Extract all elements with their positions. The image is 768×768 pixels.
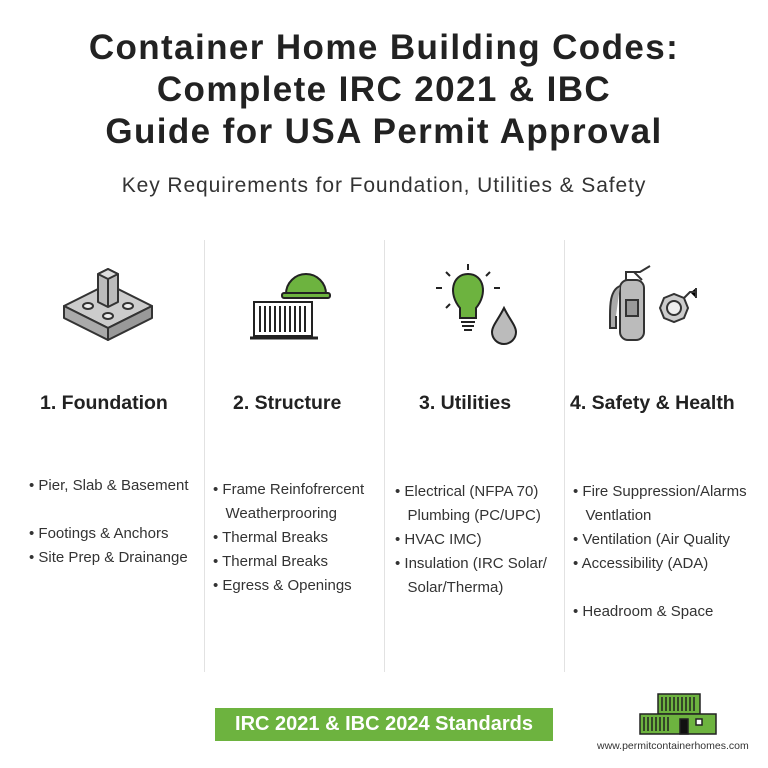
list: utilities: • HVAC IMC) (395, 531, 482, 548)
subtitle: Key Requirements for Foundation, Utilities & Safety (122, 174, 646, 197)
list: structure: • Thermal Breaks (213, 553, 328, 570)
title: Guide for USA Permit Approval (105, 112, 663, 151)
list: utilities: • Electrical (NFPA 70) (395, 483, 538, 500)
website url: www.permitcontainerhomes.com (597, 740, 749, 752)
title: Complete IRC 2021 & IBC (157, 70, 611, 109)
title: Container Home Building Codes: (89, 28, 679, 67)
title (89, 28, 679, 151)
list: structure (213, 481, 364, 594)
list: structure: • Frame Reinfofrercent (213, 481, 364, 498)
list: utilities: • Insulation (IRC Solar/ (395, 555, 547, 572)
logo: container homes (639, 693, 717, 735)
banner: standards: IRC 2021 & IBC 2024 Standards (235, 713, 533, 735)
list: foundation: • Site Prep & Drainange (29, 549, 188, 566)
banner: standards (215, 708, 553, 741)
heading: structure: 2. Structure (233, 392, 341, 414)
list: safety (573, 483, 747, 620)
icon: safety (609, 265, 697, 341)
heading: foundation: 1. Foundation (40, 392, 168, 414)
icon: foundation (63, 268, 153, 341)
list: structure: • Egress & Openings (213, 577, 352, 594)
icon: utilities (436, 264, 517, 345)
list: foundation: • Pier, Slab & Basement (29, 477, 188, 494)
list: utilities: Solar/Therma) (408, 579, 503, 596)
list: safety: • Fire Suppression/Alarms (573, 483, 747, 500)
list: utilities (395, 483, 547, 596)
list: utilities: Plumbing (PC/UPC) (408, 507, 541, 524)
list: foundation (29, 477, 188, 566)
list: safety: • Headroom & Space (573, 603, 713, 620)
list: structure: • Thermal Breaks (213, 529, 328, 546)
list: foundation: • Footings & Anchors (29, 525, 168, 542)
heading: utilities: 3. Utilities (419, 392, 511, 414)
list: structure: Weatherprooring (226, 505, 337, 522)
list: safety: Ventlation (586, 507, 651, 524)
heading: safety: 4. Safety & Health (570, 392, 735, 414)
list: safety: • Ventilation (Air Quality (573, 531, 730, 548)
list: safety: • Accessibility (ADA) (573, 555, 708, 572)
icon: structure (250, 273, 331, 340)
